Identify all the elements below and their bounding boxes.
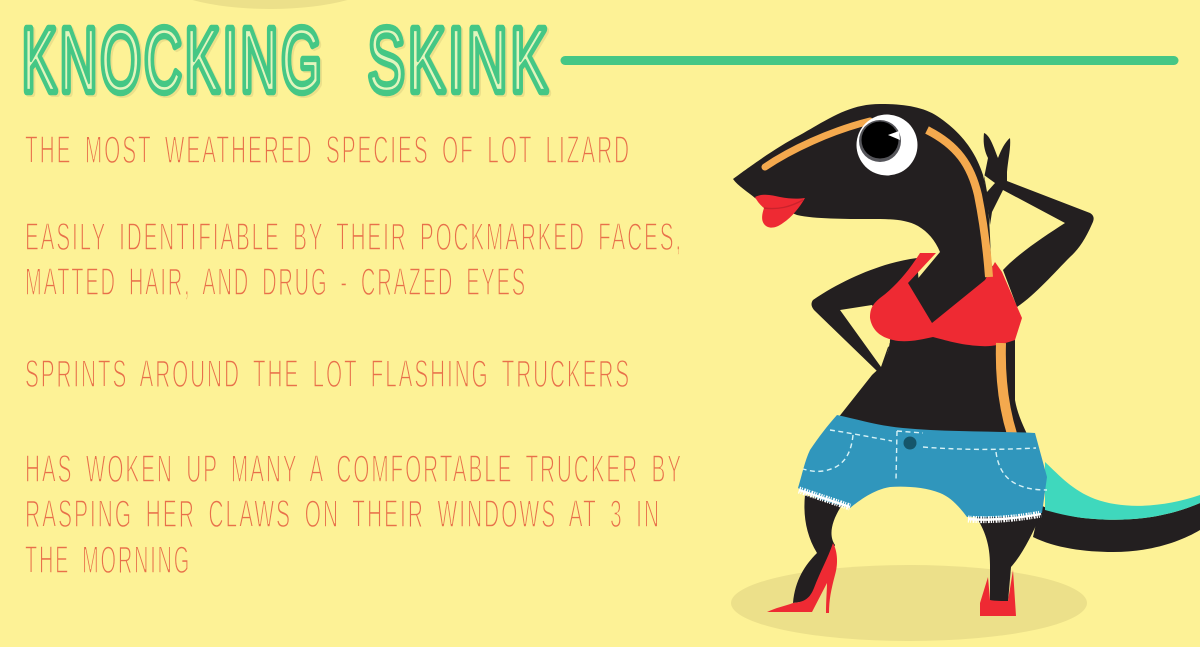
high heels — [767, 543, 1016, 616]
body text: THE MOST WEATHERED SPECIES OF LOT LIZARD — [25, 129, 631, 172]
legs — [793, 495, 1042, 603]
title rule — [565, 56, 1174, 65]
left arm on hip — [812, 258, 920, 371]
title: Knocking Skink: KNOCKING — [24, 13, 327, 113]
title: Knocking Skink: KNOCKING — [22, 11, 325, 111]
ground shadow from previous section — [160, 0, 380, 9]
illustration: skink character — [731, 104, 1200, 641]
title: Knocking Skink: SKINK — [368, 11, 551, 111]
ground shadow — [731, 565, 1087, 641]
button — [904, 436, 916, 450]
title: Knocking Skink: SKINK — [370, 13, 553, 113]
eye — [856, 114, 918, 176]
title: Knocking Skink: SKINK — [368, 11, 551, 111]
red bra — [870, 253, 1022, 346]
body text: MATTED HAIR, AND DRUG - CRAZED EYES — [25, 261, 527, 304]
title: Knocking Skink: KNOCKING — [22, 11, 325, 111]
stitching — [803, 430, 1047, 490]
tail — [1033, 462, 1200, 552]
body text: SPRINTS AROUND THE LOT FLASHING TRUCKERS — [25, 353, 631, 396]
orange stripes — [765, 121, 1012, 434]
denim shorts — [798, 415, 1047, 520]
red lips — [755, 195, 805, 228]
hand gap — [984, 175, 995, 192]
arm gap — [840, 305, 890, 367]
raised arm and hand — [984, 133, 1094, 307]
body text: THE MORNING — [25, 539, 191, 582]
frayed hem — [799, 490, 1041, 520]
torso, neck and head — [733, 104, 1030, 445]
body text: RASPING HER CLAWS ON THEIR WINDOWS AT 3 IN — [25, 493, 661, 536]
body text — [25, 129, 683, 582]
